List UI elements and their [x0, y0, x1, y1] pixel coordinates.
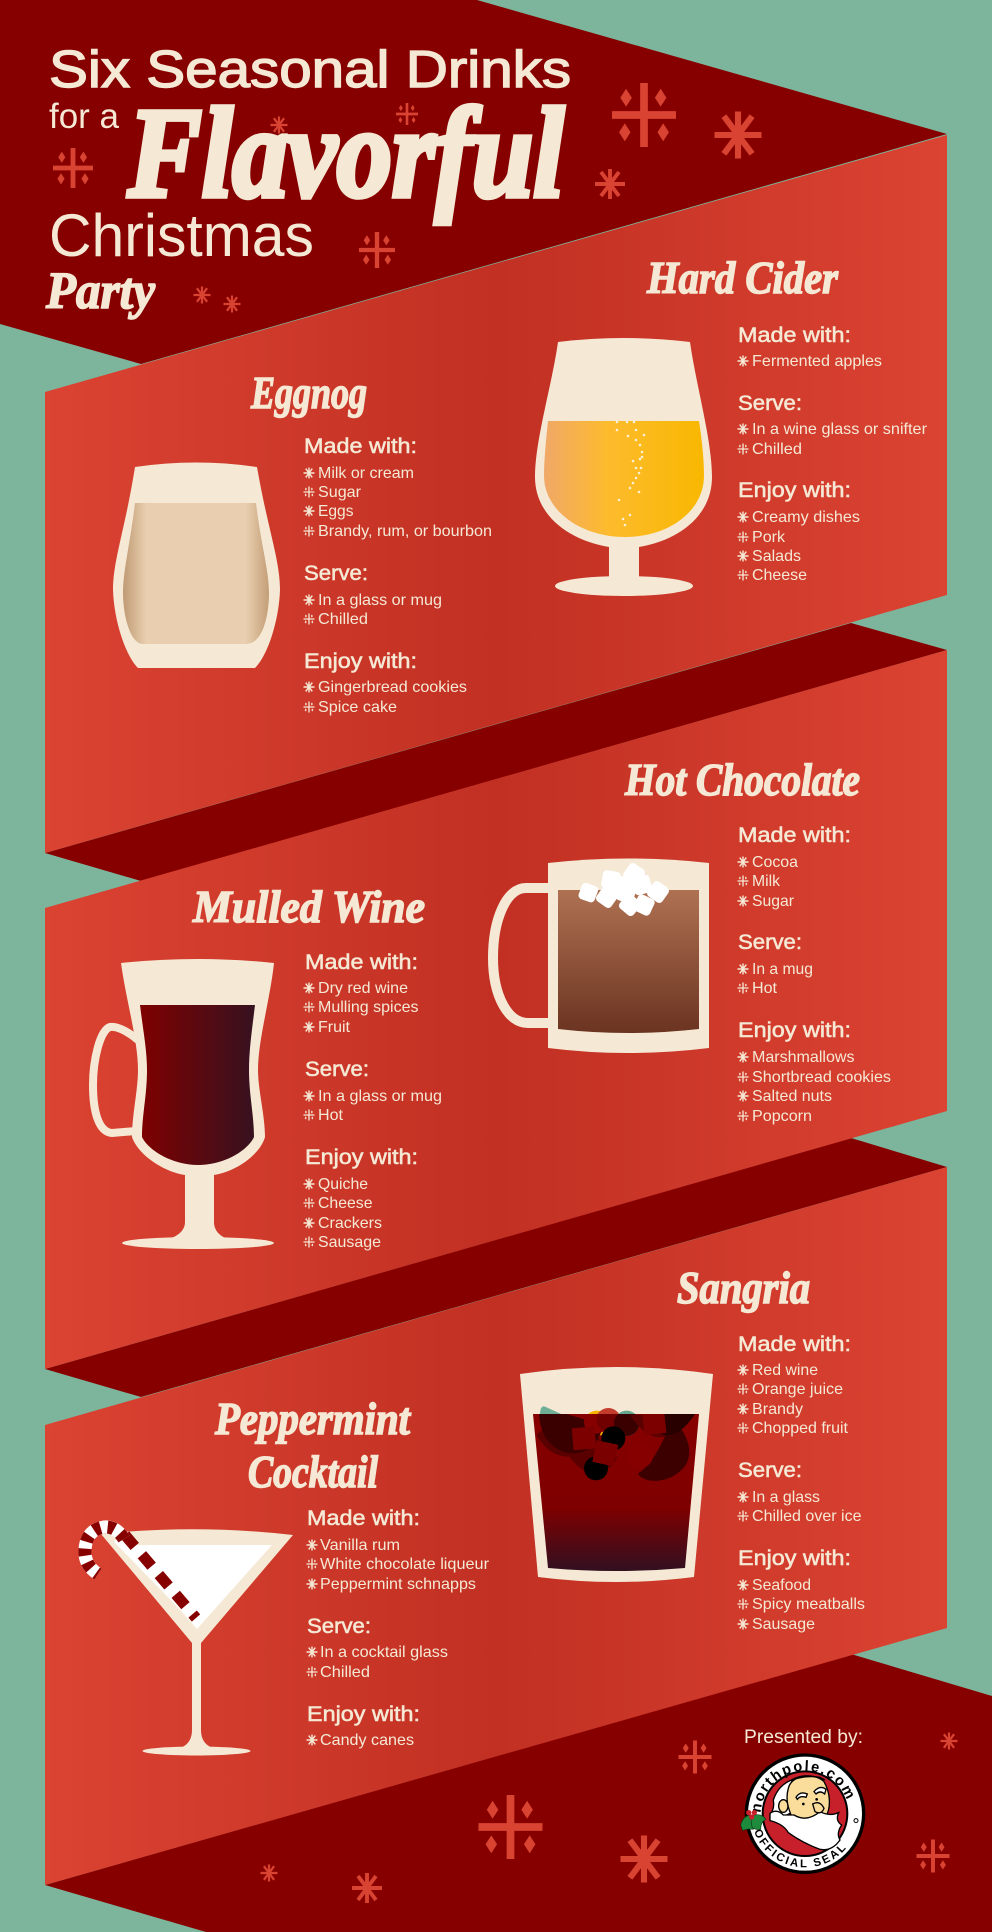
list: eggnog serve: In a glass or mug — [318, 592, 442, 609]
title: Christmas — [49, 202, 314, 269]
list: mulled wine enjoy with: Quiche — [318, 1176, 368, 1193]
title: Flavorful — [127, 82, 564, 224]
list: peppermint serve — [306, 1614, 448, 1681]
list: sangria serve: In a glass — [752, 1489, 820, 1506]
list: hot chocolate serve — [738, 930, 813, 997]
list: sangria made with: Chopped fruit — [752, 1420, 849, 1437]
panel: hard cider and eggnog — [45, 135, 947, 853]
heading: Peppermint Cocktail: Peppermint — [214, 1394, 411, 1444]
list: sangria enjoy with — [738, 1546, 865, 1633]
list: sangria enjoy with: Sausage — [752, 1616, 815, 1633]
list: sangria serve — [738, 1458, 862, 1525]
list: hot chocolate serve: Hot — [752, 980, 778, 997]
list: hot chocolate enjoy with: Marshmallows — [752, 1049, 854, 1066]
panel: title banner — [0, 0, 947, 364]
icon: hot chocolate mug — [493, 858, 709, 1053]
list: hot chocolate made with — [738, 823, 851, 910]
list: peppermint made with: Peppermint schnapps — [320, 1576, 476, 1593]
list: sangria made with — [738, 1332, 851, 1437]
title — [45, 41, 571, 320]
list: sangria enjoy with: Enjoy with: — [738, 1546, 851, 1570]
list: mulled wine serve — [304, 1057, 442, 1124]
list: hard cider serve — [738, 391, 928, 458]
list: mulled wine made with — [304, 950, 418, 1036]
title: for a — [49, 97, 120, 136]
icon: peppermint cocktail glass with candy cane — [85, 1527, 293, 1756]
list: hot chocolate enjoy with: Shortbread cookies — [752, 1069, 891, 1086]
heading: Peppermint Cocktail — [214, 1394, 411, 1497]
list: mulled wine enjoy with: Crackers — [318, 1215, 382, 1232]
list: hard cider enjoy with: Cheese — [752, 567, 807, 584]
list: eggnog enjoy with: Gingerbread cookies — [318, 679, 467, 696]
list: eggnog serve — [304, 561, 442, 628]
logo: northpole.com official seal: northpole.com — [753, 1760, 853, 1812]
list: mulled wine made with: Fruit — [318, 1019, 351, 1036]
list: mulled wine made with: Dry red wine — [318, 980, 408, 997]
list: hot chocolate made with: Made with: — [738, 823, 851, 847]
list: hot chocolate enjoy with: Enjoy with: — [738, 1018, 851, 1042]
list: hard cider serve: In a wine glass or snifter — [752, 421, 928, 438]
heading: Mulled Wine: Mulled Wine — [192, 882, 425, 932]
list: sangria enjoy with: Spicy meatballs — [752, 1596, 865, 1613]
fold: between panels two and three — [45, 1138, 947, 1397]
logo: northpole.com official seal: OFFICIAL SEAL — [755, 1830, 846, 1868]
list: mulled wine enjoy with — [304, 1145, 418, 1251]
list: hard cider enjoy with: Pork — [752, 529, 786, 546]
list: hard cider enjoy with: Salads — [752, 548, 801, 565]
title: Six Seasonal Drinks — [49, 41, 571, 99]
list: peppermint made with: Vanilla rum — [320, 1537, 400, 1554]
list: sangria made with: Red wine — [752, 1362, 818, 1379]
list: mulled wine serve: Serve: — [305, 1057, 369, 1081]
icon: eggnog glass — [113, 462, 280, 668]
list: mulled wine enjoy with: Cheese — [318, 1195, 373, 1212]
list: mulled wine enjoy with: Enjoy with: — [305, 1145, 418, 1169]
list: peppermint enjoy with: Enjoy with: — [307, 1702, 420, 1726]
list: hot chocolate made with: Milk — [752, 873, 781, 890]
snowflakes: footer — [260, 1732, 958, 1903]
list: peppermint enjoy with: Candy canes — [320, 1732, 414, 1749]
list: sangria serve: Serve: — [738, 1458, 802, 1482]
panel: sangria and peppermint cocktail — [45, 1167, 947, 1885]
icon: sangria glass — [520, 1367, 713, 1582]
list: eggnog made with — [304, 434, 492, 540]
list: eggnog made with: Brandy, rum, or bourbon — [318, 523, 492, 540]
list: hard cider serve: Serve: — [738, 391, 802, 415]
heading: Hot Chocolate: Hot Chocolate — [624, 755, 860, 805]
list: eggnog made with: Milk or cream — [318, 465, 414, 482]
text: presented by: Presented by: — [744, 1727, 863, 1748]
list: eggnog made with: Eggs — [318, 503, 354, 520]
heading: Sangria: Sangria — [677, 1263, 810, 1313]
list: sangria serve: Chilled over ice — [752, 1508, 862, 1525]
list: mulled wine serve: Hot — [318, 1107, 344, 1124]
snowflakes: title — [53, 83, 762, 312]
list: hot chocolate enjoy with: Popcorn — [752, 1108, 812, 1125]
list: eggnog enjoy with: Spice cake — [318, 699, 397, 716]
title: Party — [45, 263, 156, 320]
icon: mulled wine glass — [93, 959, 274, 1249]
list: hard cider made with — [738, 323, 882, 370]
list: hot chocolate serve: In a mug — [752, 961, 813, 978]
list: eggnog enjoy with — [304, 649, 467, 716]
fruit in sangria — [537, 1406, 695, 1481]
list: peppermint made with: Made with: — [307, 1506, 420, 1530]
list: sangria made with: Made with: — [738, 1332, 851, 1356]
list: hot chocolate serve: Serve: — [738, 930, 802, 954]
list: peppermint serve: Chilled — [320, 1664, 370, 1681]
list: hot chocolate made with: Sugar — [752, 893, 795, 910]
list: sangria enjoy with: Seafood — [752, 1577, 811, 1594]
list: eggnog made with: Made with: — [304, 434, 417, 458]
fold: between panels one and two — [45, 623, 947, 881]
list: mulled wine made with: Mulling spices — [318, 999, 418, 1016]
list: eggnog enjoy with: Enjoy with: — [304, 649, 417, 673]
list: mulled wine enjoy with: Sausage — [318, 1234, 381, 1251]
list: mulled wine serve: In a glass or mug — [318, 1088, 442, 1105]
list: peppermint serve: In a cocktail glass — [320, 1644, 448, 1661]
list: hot chocolate enjoy with: Salted nuts — [752, 1088, 832, 1105]
panel: hot chocolate and mulled wine — [45, 650, 947, 1369]
list: hard cider enjoy with: Creamy dishes — [752, 509, 860, 526]
list: sangria made with: Brandy — [752, 1401, 803, 1418]
list: peppermint enjoy with — [306, 1702, 420, 1749]
list: eggnog made with: Sugar — [318, 484, 362, 501]
list: sangria made with: Orange juice — [752, 1381, 843, 1398]
heading: Peppermint Cocktail: Cocktail — [248, 1447, 378, 1497]
list: hot chocolate enjoy with — [738, 1018, 891, 1125]
panel: footer banner — [45, 1654, 992, 1932]
list: mulled wine made with: Made with: — [305, 950, 418, 974]
list: peppermint made with — [306, 1506, 490, 1593]
list: peppermint serve: Serve: — [307, 1614, 371, 1638]
list: peppermint made with: White chocolate liqueur — [320, 1556, 490, 1573]
icon: cider glass — [535, 338, 712, 596]
heading: Eggnog: Eggnog — [250, 368, 367, 418]
list: hard cider enjoy with — [738, 478, 860, 584]
list: hard cider made with: Fermented apples — [752, 353, 882, 370]
logo: northpole.com official seal — [740, 1753, 866, 1874]
list: eggnog serve: Chilled — [318, 611, 368, 628]
list: eggnog serve: Serve: — [304, 561, 368, 585]
heading: Hard Cider: Hard Cider — [646, 253, 838, 303]
list: hard cider enjoy with: Enjoy with: — [738, 478, 851, 502]
list: hot chocolate made with: Cocoa — [752, 854, 798, 871]
list: hard cider made with: Made with: — [738, 323, 851, 347]
list: hard cider serve: Chilled — [752, 441, 802, 458]
